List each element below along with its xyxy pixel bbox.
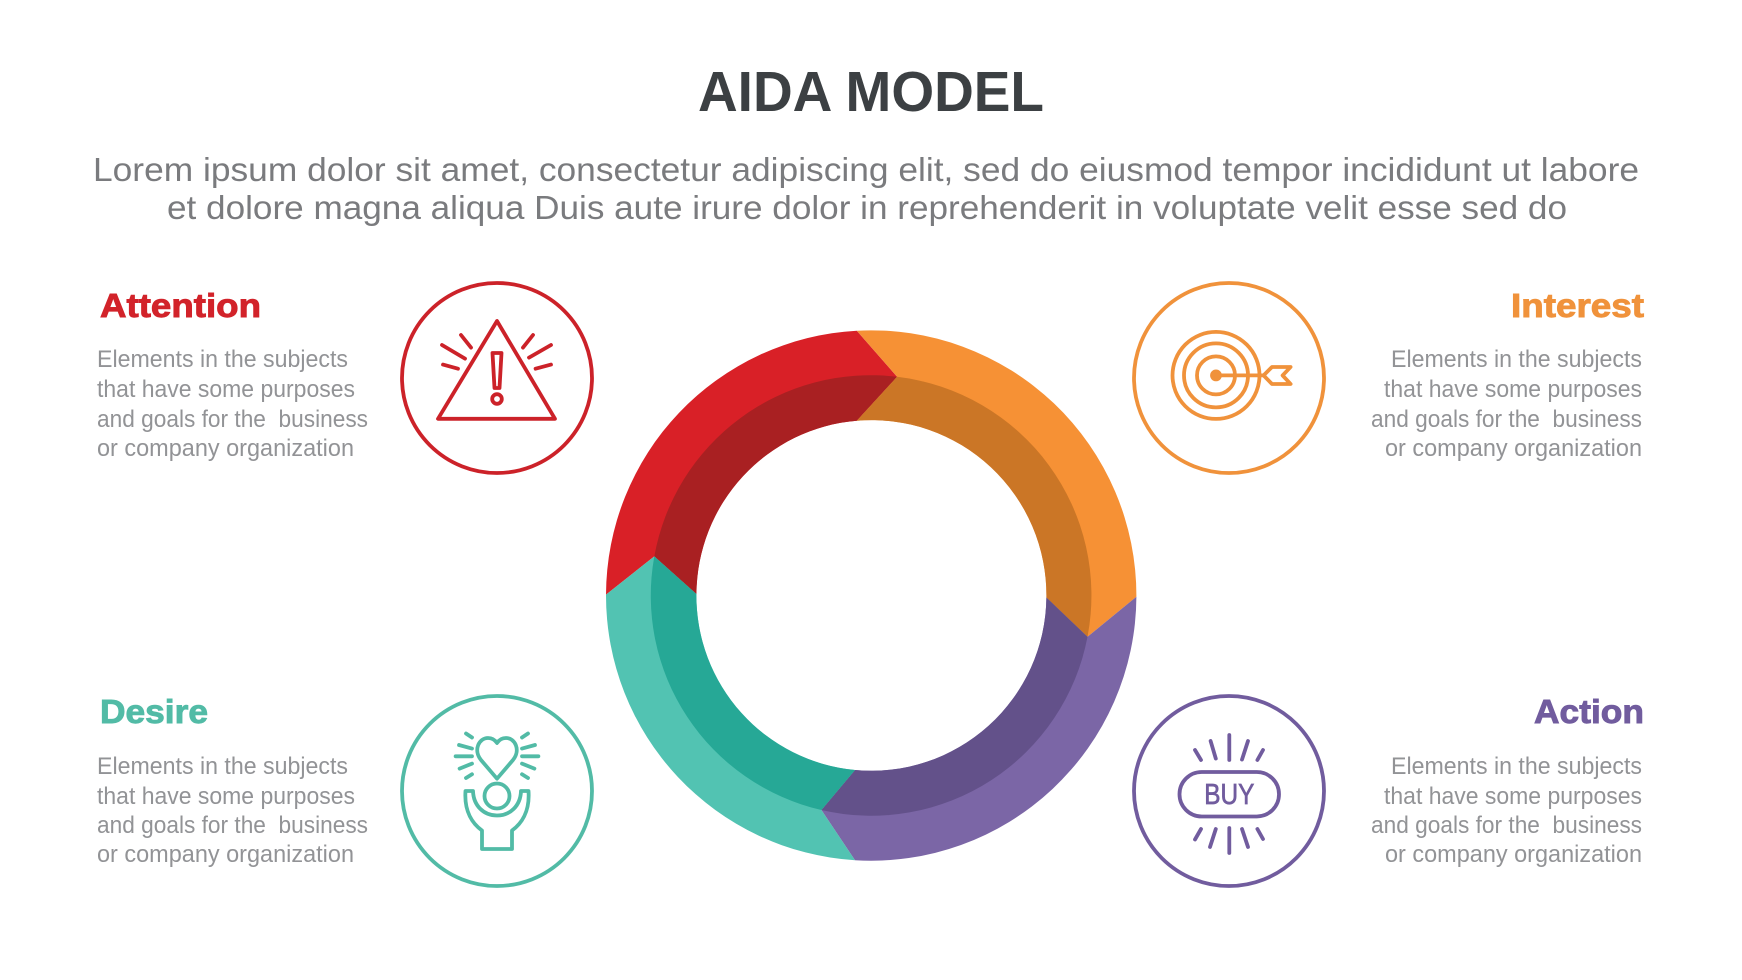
text block: attention: Elements in the subjects bbox=[97, 346, 348, 373]
panel: attention bbox=[97, 283, 592, 473]
text block: interest: that have some purposes bbox=[1384, 376, 1642, 403]
text block: interest bbox=[1371, 346, 1642, 462]
heading: attention: Attention bbox=[100, 287, 261, 324]
text block: action bbox=[1371, 753, 1642, 868]
heading: action: Action bbox=[1534, 693, 1644, 730]
text block: desire: or company organization bbox=[97, 841, 354, 868]
text block: desire: Elements in the subjects bbox=[97, 753, 348, 780]
text block: action: and goals for the business bbox=[1371, 812, 1642, 839]
icon: warning triangle in circle bbox=[402, 283, 592, 473]
text block: action: that have some purposes bbox=[1384, 783, 1642, 810]
panel: action bbox=[1134, 693, 1644, 886]
segment: desire bbox=[606, 556, 855, 860]
segment: interest bbox=[857, 330, 1136, 637]
text block: attention: that have some purposes bbox=[97, 376, 355, 403]
icon: target with arrow in circle bbox=[1134, 283, 1324, 473]
icon: buy button in circle: BUY bbox=[1204, 779, 1254, 811]
title: AIDA MODEL bbox=[698, 60, 1044, 124]
text block: desire: and goals for the business bbox=[97, 812, 368, 839]
text block: desire: that have some purposes bbox=[97, 783, 355, 810]
ring chart bbox=[606, 330, 1136, 861]
text block: interest: Elements in the subjects bbox=[1391, 346, 1642, 373]
text block: interest: and goals for the business bbox=[1371, 406, 1642, 433]
panel: desire bbox=[97, 693, 592, 886]
icon: hands holding heart in circle bbox=[402, 696, 592, 886]
subtitle text block: et dolore magna aliqua Duis aute irure dolor in reprehenderit in voluptate velit esse sed do bbox=[167, 189, 1567, 226]
panel: interest bbox=[1134, 283, 1644, 473]
segment: action bbox=[821, 597, 1136, 861]
segment: attention bbox=[606, 331, 897, 595]
heading: interest: Interest bbox=[1511, 287, 1644, 324]
text block: attention: or company organization bbox=[97, 435, 354, 462]
icon: buy button in circle bbox=[1134, 696, 1324, 886]
subtitle text block bbox=[93, 151, 1639, 226]
text block: attention bbox=[97, 346, 368, 462]
text block: interest: or company organization bbox=[1385, 435, 1642, 462]
text block: attention: and goals for the business bbox=[97, 406, 368, 433]
heading: desire: Desire bbox=[100, 693, 208, 730]
text block: desire bbox=[97, 753, 368, 868]
text block: action: Elements in the subjects bbox=[1391, 753, 1642, 780]
text block: action: or company organization bbox=[1385, 841, 1642, 868]
subtitle text block: Lorem ipsum dolor sit amet, consectetur adipiscing elit, sed do eiusmod tempor incididunt ut labore bbox=[93, 151, 1639, 188]
